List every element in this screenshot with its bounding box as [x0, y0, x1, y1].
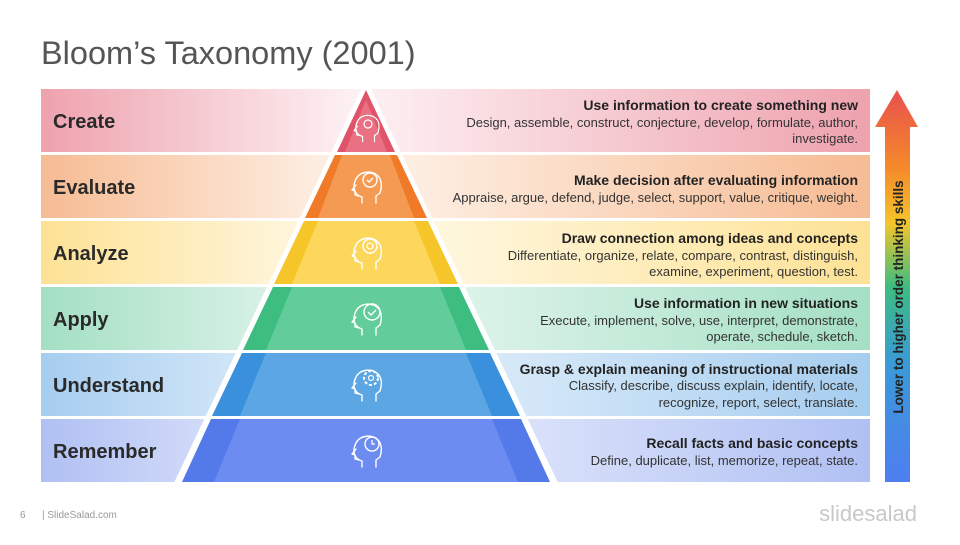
title: Bloom’s Taxonomy (2001): [41, 35, 416, 71]
row: Evaluate: Make decision after evaluating information: [574, 172, 858, 188]
row: Evaluate: Appraise, argue, defend, judge, select, support, value, critique, weight.: [453, 190, 858, 205]
row: Create: investigate.: [792, 131, 858, 146]
row: Understand: Understand: [53, 375, 164, 397]
row: Apply: [41, 287, 870, 350]
level: Evaluate: [305, 155, 427, 218]
row: Remember: Recall facts and basic concepts: [646, 435, 858, 451]
row: Analyze: examine, experiment, question, test.: [649, 264, 858, 279]
footer: 6: [20, 510, 26, 521]
level: Remember: [182, 419, 550, 482]
row: Remember: [41, 419, 870, 482]
row: Apply: operate, schedule, sketch.: [706, 329, 858, 344]
row: Remember: Remember: [53, 441, 157, 463]
row: Remember: Define, duplicate, list, memorize, repeat, state.: [591, 453, 858, 468]
row: Create: [41, 89, 870, 152]
row: Analyze: Analyze: [53, 243, 129, 265]
row: Create: Design, assemble, construct, conjecture, develop, formulate, author,: [466, 115, 858, 130]
row: Evaluate: Evaluate: [53, 177, 135, 199]
row: Apply: Execute, implement, solve, use, interpret, demonstrate,: [540, 313, 858, 328]
row: Understand: Classify, describe, discuss explain, identify, locate,: [569, 378, 858, 393]
pyramid: [172, 79, 560, 487]
row: Understand: [41, 353, 870, 416]
footer: | SlideSalad.com: [42, 510, 117, 521]
row: Analyze: [41, 221, 870, 284]
level: Understand: [212, 353, 520, 416]
row: Apply: Use information in new situations: [634, 295, 858, 311]
row: Evaluate: [41, 155, 870, 218]
level: Analyze: [274, 221, 458, 284]
level: Apply: [243, 287, 489, 350]
logo: slidesalad: [819, 501, 917, 526]
row: Understand: Grasp & explain meaning of instructional materials: [520, 361, 858, 377]
row: Understand: recognize, report, select, translate.: [659, 395, 858, 410]
row: Analyze: Differentiate, organize, relate, compare, contrast, distinguish,: [508, 248, 858, 263]
row: Create: Create: [53, 111, 115, 133]
row: Apply: Apply: [53, 309, 109, 331]
arrow: lower to higher order thinking skills: [875, 90, 918, 482]
level: Create: [337, 90, 395, 152]
arrow: lower to higher order thinking skills: Lower to higher order thinking skills: [891, 180, 906, 414]
row: Create: Use information to create something new: [583, 97, 858, 113]
row: Analyze: Draw connection among ideas and concepts: [562, 230, 858, 246]
